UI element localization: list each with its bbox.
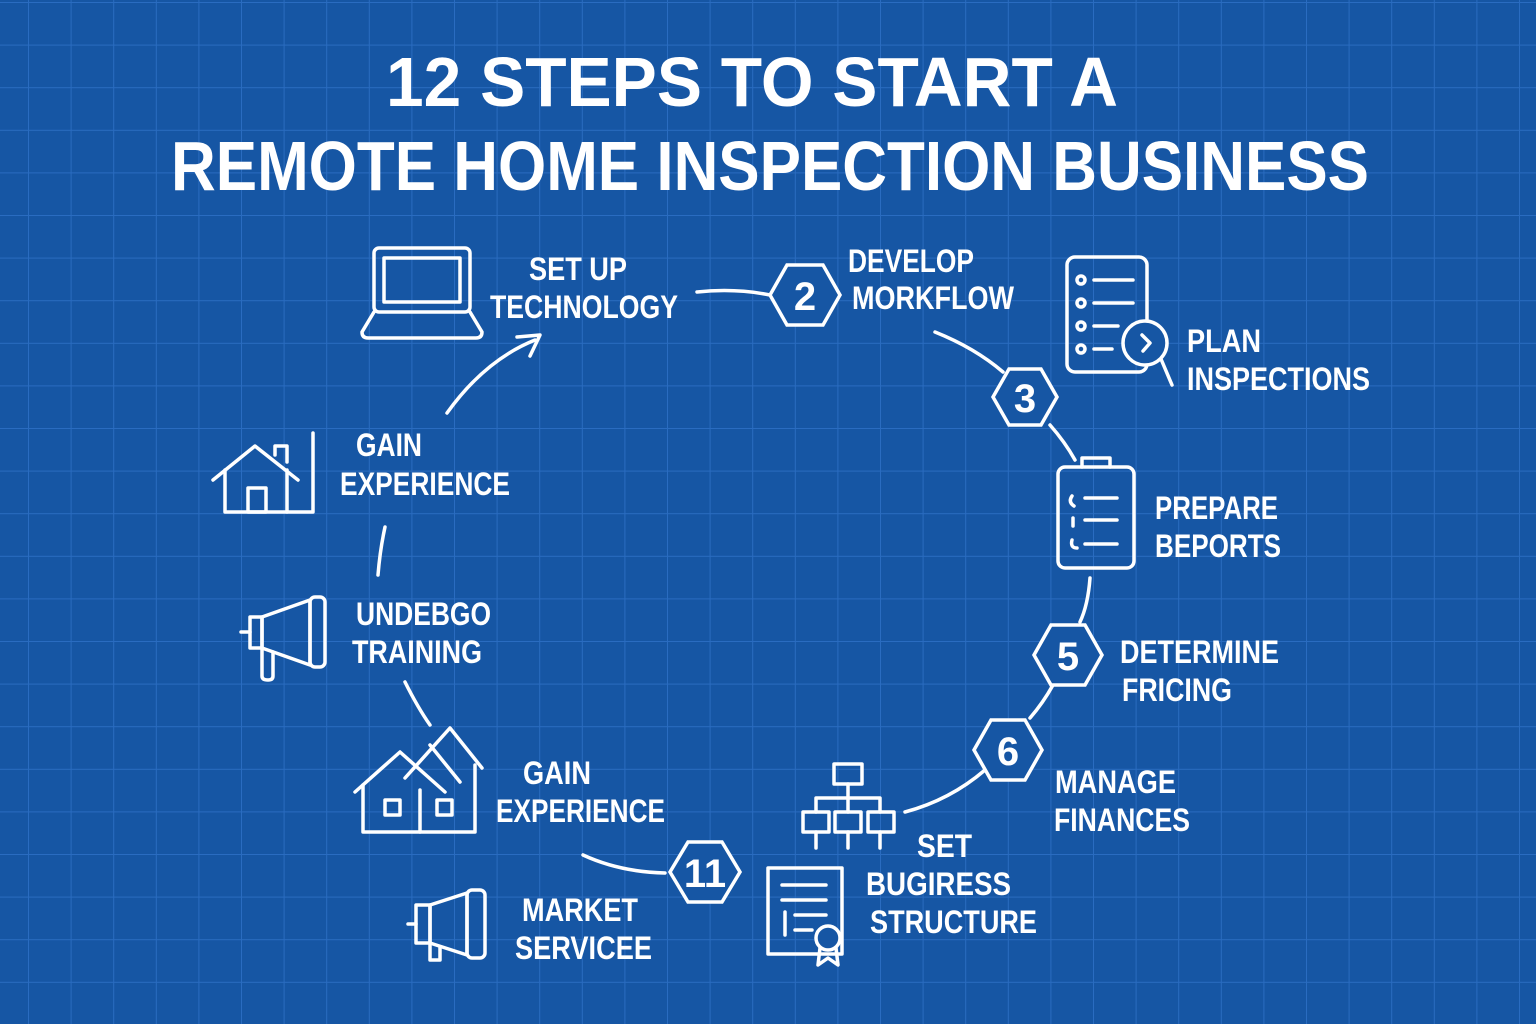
label: develop workflow: DEVELOP [848, 243, 974, 279]
label: develop workflow: MORKFLOW [852, 280, 1015, 316]
label: set business structure [866, 828, 1037, 940]
icon: org chart [803, 764, 894, 848]
hexagon 5: 5 [1057, 635, 1079, 679]
label: prepare reports: BEPORTS [1155, 528, 1281, 564]
connector lines [378, 291, 1090, 873]
hexagon 3 [993, 369, 1057, 425]
hexagon 6: 6 [997, 730, 1019, 774]
hexagon 5 [1034, 625, 1102, 685]
hexagon 11: 11 [684, 852, 726, 896]
label: market services [515, 892, 652, 966]
label: undergo training: UNDEBGO [356, 596, 491, 632]
icon: houses [355, 728, 482, 832]
hexagon 2 [770, 265, 840, 325]
label: plan inspections: PLAN [1187, 323, 1261, 359]
icon: checklist with magnifier [1067, 257, 1172, 385]
icon: laptop [362, 248, 482, 338]
label: manage finances [1054, 764, 1190, 838]
title [171, 43, 1369, 205]
icon: house [213, 433, 313, 512]
label: develop workflow [848, 243, 1015, 316]
label: manage finances: FINANCES [1054, 802, 1190, 838]
icon: certificate [768, 868, 842, 965]
hexagon 11 [670, 842, 740, 902]
label: undergo training [352, 596, 491, 670]
label: determine pricing: DETERMINE [1120, 634, 1279, 670]
label: determine pricing [1120, 634, 1279, 708]
title: REMOTE HOME INSPECTION BUSINESS [171, 127, 1369, 205]
hexagon 6 [974, 720, 1042, 780]
icon: clipboard [1058, 458, 1134, 568]
label: prepare reports [1155, 490, 1281, 564]
label: gain experience bottom [496, 755, 665, 829]
label: set business structure: BUGIRESS [866, 866, 1011, 902]
label: set up technology: SET UP [529, 251, 627, 287]
label: set business structure: SET [917, 828, 972, 864]
label: set up technology [490, 251, 678, 325]
label: manage finances: MANAGE [1055, 764, 1176, 800]
icon: megaphone market [408, 890, 485, 960]
label: gain experience top: EXPERIENCE [340, 466, 510, 502]
label: gain experience top [340, 427, 510, 502]
label: undergo training: TRAINING [352, 634, 482, 670]
label: gain experience bottom: GAIN [523, 755, 591, 791]
label: plan inspections [1187, 323, 1370, 397]
title: 12 STEPS TO START A [386, 43, 1118, 121]
label: set business structure: STRUCTURE [870, 904, 1037, 940]
label: gain experience bottom: EXPERIENCE [496, 793, 665, 829]
label: set up technology: TECHNOLOGY [490, 289, 678, 325]
arrow: to step 1 [447, 335, 540, 413]
label: plan inspections: INSPECTIONS [1187, 361, 1370, 397]
label: market services: SERVICEE [515, 930, 652, 966]
hexagon 2: 2 [794, 275, 816, 319]
hexagon 3: 3 [1014, 377, 1036, 421]
label: determine pricing: FRICING [1122, 672, 1232, 708]
icon: megaphone training [241, 597, 325, 680]
label: gain experience top: GAIN [356, 427, 422, 463]
label: prepare reports: PREPARE [1155, 490, 1278, 526]
label: market services: MARKET [522, 892, 638, 928]
